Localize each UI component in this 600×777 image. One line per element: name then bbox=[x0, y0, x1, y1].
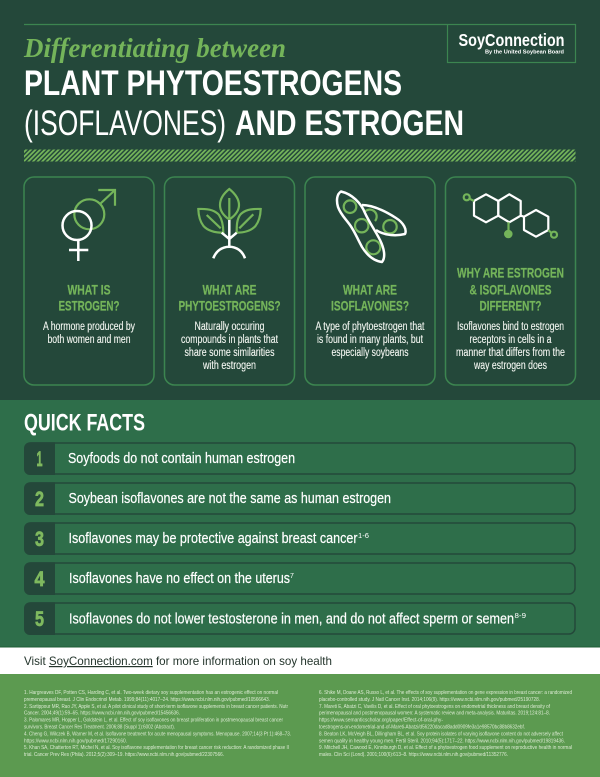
references right column: males. Clin Sci (Lond). 2001;100(6):613–8. https://www.ncbi.nlm.nih.gov/pubmed/11352776. bbox=[319, 752, 508, 758]
fact 2: 2 bbox=[35, 488, 44, 511]
text: phytoestrogens definition: compounds in plants that bbox=[181, 334, 279, 346]
heading: what is estrogen: ESTROGEN? bbox=[58, 298, 120, 314]
text: phytoestrogens definition: share some similarities bbox=[184, 347, 275, 359]
heading: what are phytoestrogens: PHYTOESTROGENS? bbox=[178, 298, 280, 314]
references right column: perimenopausal and postmenopausal women: A systematic review and meta-analysis. Maturitas. 2019;124:81–8. bbox=[319, 710, 550, 716]
striped divider bbox=[24, 150, 576, 162]
text: estrogen definition bbox=[43, 321, 135, 346]
heading: what are isoflavones: ISOFLAVONES? bbox=[331, 298, 409, 314]
heading: why different bbox=[457, 265, 564, 314]
text: isoflavones definition: A type of phytoestrogen that bbox=[316, 321, 425, 333]
references right column: 9. Mitchell JH, Cawood E, Kinniburgh D, et al. Effect of a phytoestrogen food supplement on reproductive health in normal bbox=[319, 745, 572, 751]
references right column: placebo-controlled study. J Natl Cancer Inst. 2014;106(9). https://www.ncbi.nlm.nih.gov/pubmed/25190728. bbox=[319, 697, 540, 703]
references left column bbox=[24, 690, 291, 758]
website banner bbox=[0, 647, 600, 674]
references left column: 1. Hargreaves DF, Potten CS, Harding C, et al. Two-week dietary soy supplementation has an estrogenic effect on normal bbox=[24, 690, 278, 696]
fact 5: 5 bbox=[35, 608, 44, 631]
fact 4: 4 bbox=[34, 568, 45, 591]
panel: what are isoflavones bbox=[305, 177, 435, 385]
fact 4: 7 bbox=[290, 573, 294, 580]
heading: what are phytoestrogens bbox=[178, 281, 280, 314]
fact 1: 1 bbox=[36, 448, 43, 471]
references left column: 3. Palomares MR, Hopper L, Goldstein L, et al. Effect of soy isoflavones on breast proliferation in postmenopausal breast cancer bbox=[24, 718, 283, 724]
fact 2: Soybean isoflavones are not the same as human estrogen bbox=[68, 490, 391, 507]
panel: why different bbox=[446, 177, 576, 385]
fact 3: 1-6 bbox=[358, 533, 369, 540]
header rule bbox=[24, 24, 447, 26]
logo bbox=[448, 24, 576, 62]
references right column: toestrogens-on-endometrial-and-of-Mareti-Abatzi/d56220dacad8add0909fe3a1e98570bc88b8632ebf. bbox=[319, 724, 525, 730]
panel: what is estrogen bbox=[24, 177, 154, 385]
title: (ISOFLAVONES) bbox=[24, 104, 226, 143]
fact 5: Isoflavones do not lower testosterone in men, and do not affect sperm or semen bbox=[69, 610, 514, 628]
references left column: https://www.ncbi.nlm.nih.gov/pubmed/17290160. bbox=[24, 738, 127, 744]
title: AND ESTROGEN bbox=[235, 104, 464, 143]
text: phytoestrogens definition bbox=[181, 321, 279, 372]
text: isoflavones definition: especially soybeans bbox=[332, 347, 409, 359]
website banner: Visit SoyConnection.com for more information on soy health bbox=[24, 654, 332, 668]
fact 3: Isoflavones may be protective against breast cancer bbox=[68, 530, 358, 547]
references left column: premenopausal breast. J Clin Endocrinol Metab. 1999;84(11):4017–24. https://www.ncbi.nlm.nih.gov/pubmed/10566643. bbox=[24, 697, 270, 703]
text: why different explanation: receptors in cells in a bbox=[470, 334, 552, 346]
fact 5: 8-9 bbox=[514, 613, 526, 620]
heading: quick facts: QUICK FACTS bbox=[24, 410, 145, 436]
heading: what are phytoestrogens: WHAT ARE bbox=[202, 281, 256, 297]
fact 2 bbox=[24, 482, 575, 515]
title bbox=[23, 33, 464, 143]
references left column: trial. Cancer Prev Res (Phila). 2012;5(2):309–19. https://www.ncbi.nlm.nih.gov/pubmed/22307566. bbox=[24, 752, 224, 758]
fact 3: 3 bbox=[35, 528, 44, 551]
text: isoflavones definition bbox=[316, 321, 425, 359]
title: PLANT PHYTOESTROGENS bbox=[24, 64, 402, 103]
title: Differentiating between bbox=[23, 33, 286, 63]
heading: why different: DIFFERENT? bbox=[480, 298, 542, 314]
fact 1: Soyfoods do not contain human estrogen bbox=[68, 450, 295, 467]
text: why different explanation bbox=[456, 321, 565, 372]
text: why different explanation: way estrogen does bbox=[473, 360, 547, 372]
heading: why different: & ISOFLAVONES bbox=[470, 281, 552, 297]
references left column: survivors. Breast Cancer Res Treatment. 2006;88 (Suppl 1):6002 (Abstract). bbox=[24, 724, 175, 730]
heading: what are isoflavones: WHAT ARE bbox=[343, 281, 397, 297]
references left column: 2. Sartippour MR, Rao JY, Apple S, et al. A pilot clinical study of short-term isoflavone supplements in breast cancer patients. Nutr bbox=[24, 704, 288, 710]
heading: what are isoflavones bbox=[331, 281, 409, 314]
fact 3 bbox=[24, 522, 575, 555]
references left column: 4. Cheng G, Wilczek B, Warner M, et al. Isoflavone treatment for acute menopausal symptoms. Menopause. 2007;14(3 Pt 1):468–73. bbox=[24, 732, 291, 738]
icon: plant bbox=[198, 189, 261, 258]
references right column: https://www.semanticscholar.org/paper/Effect-of-oral-phy- bbox=[319, 718, 443, 724]
text: isoflavones definition: is found in many plants, but bbox=[317, 334, 424, 346]
text: why different explanation: manner that differs from the bbox=[456, 347, 565, 359]
logo: By the United Soybean Board bbox=[485, 50, 564, 56]
references left column: 5. Khan SA, Chatterton RT, Michel N, et al. Soy isoflavone supplementation for breast cancer risk reduction: A randomized phase II bbox=[24, 745, 289, 751]
text: estrogen definition: A hormone produced by bbox=[43, 321, 135, 333]
references right column bbox=[319, 690, 572, 758]
panel: what are phytoestrogens bbox=[164, 177, 294, 385]
fact 5 bbox=[24, 602, 575, 635]
text: why different explanation: Isoflavones bind to estrogen bbox=[457, 321, 564, 333]
icon: gender symbols bbox=[62, 190, 115, 261]
references right column: 6. Shike M, Doane AS, Russo L, et al. The effects of soy supplementation on gene expression in breast cancer: a randomized bbox=[319, 690, 572, 696]
text: phytoestrogens definition: Naturally occuring bbox=[194, 321, 264, 333]
icon: molecule bbox=[464, 194, 557, 238]
heading: what is estrogen bbox=[58, 281, 120, 314]
fact 4: Isoflavones have no effect on the uterus bbox=[69, 570, 290, 587]
fact 1 bbox=[24, 442, 575, 475]
references right column: semen quality in healthy young men. Fertil Steril. 2010;94(5):1717–22. https://www.ncbi.nlm.nih.gov/pubmed/19819436. bbox=[319, 738, 565, 744]
references right column: 8. Beaton LK, McVeigh BL, Dillingham BL, et al. Soy protein isolates of varying isoflavone content do not adversely affect bbox=[319, 732, 563, 738]
text: phytoestrogens definition: with estrogen bbox=[202, 360, 256, 372]
heading: what is estrogen: WHAT IS bbox=[68, 281, 110, 297]
logo: SoyConnection bbox=[458, 30, 564, 50]
references left column: Cancer. 2004;49(1):59–65. https://www.ncbi.nlm.nih.gov/pubmed/15456636. bbox=[24, 710, 180, 716]
icon: soybean pod bbox=[337, 192, 406, 262]
text: estrogen definition: both women and men bbox=[48, 334, 130, 346]
references right column: 7. Mareti E, Abatzi C, Vavilis D, et al. Effect of oral phytoestrogens on endometrial thickness and breast density of bbox=[319, 704, 550, 710]
fact 4 bbox=[24, 562, 575, 595]
